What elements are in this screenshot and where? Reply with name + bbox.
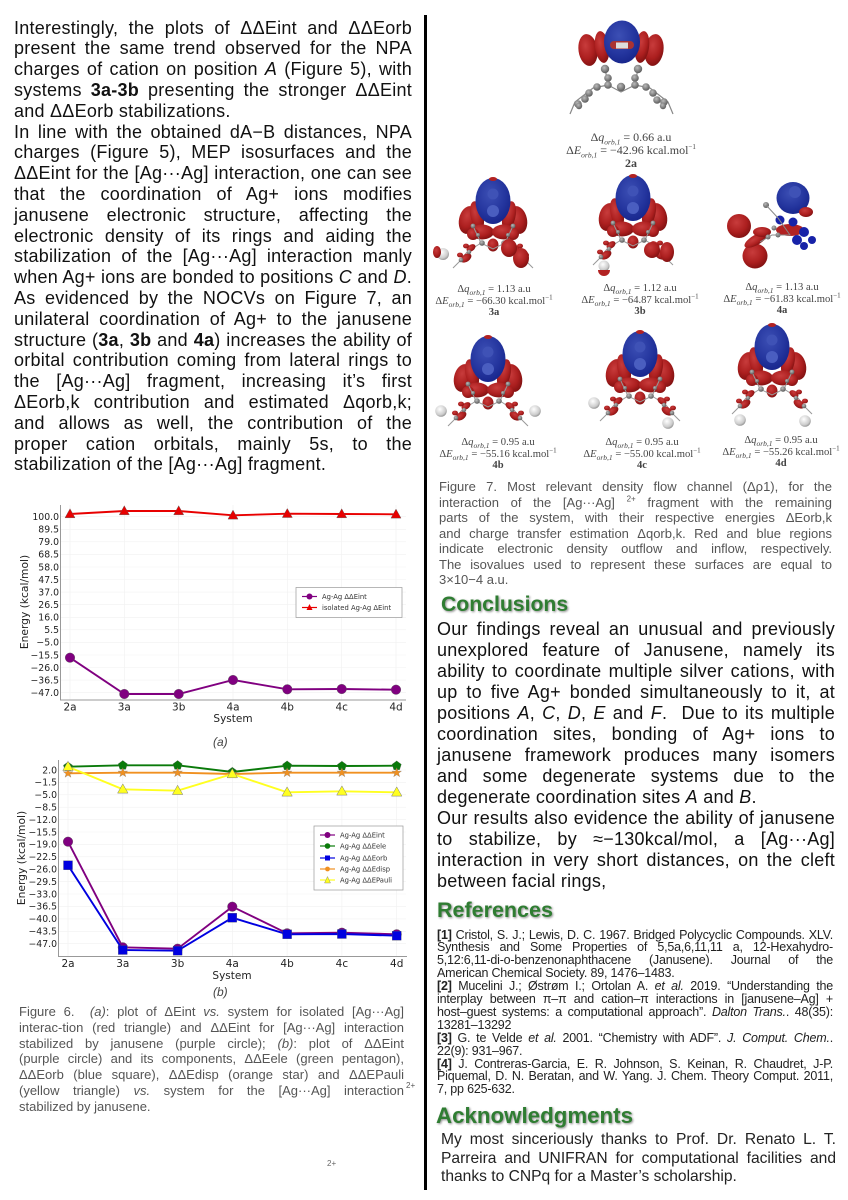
- text block: conclusions: ability to coordinate multiple silver cations, with: [437, 660, 835, 680]
- label: 3a values: 3a: [489, 307, 499, 318]
- text block: conclusions: and some degenerate systems due to the: [437, 766, 835, 786]
- label: 4c values: [583, 437, 701, 471]
- label: 2a values: Δqorb,1 = 0.66 a.u: [591, 130, 671, 146]
- legend (b): Ag-Ag ΔΔEele: [340, 842, 386, 850]
- caption: Figure 7: Figure 7. Most relevant density flow channel (Δρ1), for the: [439, 479, 832, 494]
- text block: acknowledgments: [441, 1131, 836, 1185]
- text block: interaction analysis: stabilization of the [Ag···Ag] interaction manly: [14, 246, 412, 266]
- label: (b): (b): [213, 985, 228, 999]
- text block: references: Synthesis and Some Properties of 5,5a,6,11,11 a, 12-Hexahydro-: [437, 940, 833, 954]
- y tick labels: −5.0: [36, 638, 59, 649]
- label: 4d values: ΔEorb,1 = −55.26 kcal.mol−1: [722, 444, 840, 460]
- text block: interaction analysis: ΔEorb,k contribution and estimated Δqorb,k;: [14, 392, 412, 412]
- label: 3a values: ΔEorb,1 = −66.30 kcal.mol−1: [435, 293, 553, 309]
- text block: interaction analysis: janusene electronic structure, affecting the: [14, 205, 412, 225]
- y tick labels: −36.5: [30, 675, 59, 686]
- x tick labels: 3b: [172, 702, 186, 714]
- chart (a): energy vs system: [18, 505, 406, 725]
- text block: interaction analysis: unilateral coordination of Ag+ to the janusene: [14, 309, 412, 329]
- x tick labels: 4a: [226, 702, 240, 714]
- caption: Figure 7: [439, 479, 832, 587]
- legend (b): Ag-Ag ΔΔEdisp: [340, 866, 390, 874]
- series: dispersion: [63, 768, 402, 778]
- label: 4b values: [439, 437, 557, 471]
- text block: interaction analysis: In line with the obtained dA−B distances, NPA: [14, 122, 412, 142]
- x tick labels: [61, 958, 403, 970]
- text block: conclusions: Our findings reveal an unusual and previously: [437, 618, 835, 638]
- text block: references: 13281–13292: [437, 1018, 511, 1032]
- molecule 4b: [435, 335, 541, 426]
- x tick labels: 3a: [118, 702, 131, 714]
- label: 4c values: 4c: [637, 460, 647, 471]
- heading: Acknowledgments: Acknowledgments: [436, 1103, 633, 1128]
- x tick labels: 4a: [226, 958, 239, 970]
- superscript fragment: 2+: [406, 1081, 415, 1090]
- text block: interaction analysis: Interestingly, the plots of ΔΔEint and ΔΔEorb: [14, 18, 412, 38]
- y tick labels: −22.5: [28, 852, 57, 863]
- label: 3a values: Δqorb,1 = 1.13 a.u: [457, 284, 531, 297]
- legend (a): [296, 588, 402, 618]
- text block: interaction analysis: present the same trend observed for the NPA: [14, 38, 412, 58]
- label: 4b values: ΔEorb,1 = −55.16 kcal.mol−1: [439, 446, 557, 462]
- chart (b): energy components vs system: [15, 760, 407, 982]
- text block: interaction analysis: the [Ag···Ag] fragment, increasing it’s first: [14, 371, 412, 391]
- y tick labels: 58.0: [38, 562, 59, 573]
- x tick labels: 4d: [389, 702, 403, 714]
- molecule 3b: [593, 174, 674, 276]
- x tick labels: 3b: [171, 958, 185, 970]
- text block: conclusions: degenerate coordination sites A and B.: [437, 786, 757, 806]
- text block: conclusions: positions A, C, D, E and F. Due to its multiple: [437, 702, 835, 722]
- y tick labels: 89.5: [38, 525, 59, 536]
- y axis title: Energy (kcal/mol): [18, 555, 31, 649]
- label: 2a values: [566, 130, 696, 170]
- caption: Figure 6: (purple circle) and its components, ΔΔEele (green pentagon),: [19, 1051, 404, 1066]
- caption: Figure 7: 3×10−4 a.u.: [439, 572, 508, 587]
- y tick labels: −47.0: [28, 939, 57, 950]
- y tick labels: −19.0: [28, 840, 57, 851]
- x tick labels: 2a: [61, 958, 75, 970]
- text block: conclusions: between facial rings,: [437, 870, 606, 890]
- x tick labels: 4b: [281, 702, 294, 714]
- x tick labels: 4b: [280, 958, 294, 970]
- y tick labels: 47.5: [38, 575, 59, 586]
- x tick labels: 4d: [390, 958, 403, 970]
- text block: references: Piquemal, D. N. Beratan, and W. Yang. J. Chem. Theory Comput. 2011,: [437, 1069, 833, 1083]
- series: Pauli: [63, 761, 402, 796]
- caption: Figure 7: The isovalues used to represent these surfaces are equal to: [439, 557, 832, 572]
- y tick labels: [28, 765, 57, 950]
- label: 4a values: Δqorb,1 = 1.13 a.u: [745, 282, 819, 295]
- caption: Figure 6: interac-tion (red triangle) and ΔΔEint for [Ag···Ag] interaction: [19, 1020, 404, 1035]
- text block: interaction analysis: orbital contribution coming from lateral rings to: [14, 350, 412, 370]
- text block: interaction analysis: systems 3a-3b presenting the stronger ΔΔEint: [14, 80, 412, 100]
- axes: [58, 760, 407, 956]
- figure 7: NOCV isosurfaces: [433, 20, 816, 429]
- text block: references: host–guest systems: a computational approach”. Dalton Trans.. 48(35):: [437, 1005, 833, 1019]
- text block: references: [3] G. te Velde et al. 2001. “Chemistry with ADF”. J. Comput. Chem..: [437, 1031, 833, 1045]
- caption: Figure 6: [19, 1004, 404, 1114]
- label: (a): (a): [213, 735, 228, 749]
- caption: Figure 6: ΔΔEorb (blue square), ΔΔEdisp (orange star) and ΔΔEPauli: [19, 1067, 404, 1082]
- text block: references: [2] Mucelini J.; Østrøm I.; Ortolan A. et al. 2019. “Understanding the: [437, 979, 833, 993]
- y tick labels: −15.5: [30, 650, 59, 661]
- heading: References: References: [437, 898, 553, 922]
- text block: conclusions: interaction in very short distances, on the cleft: [437, 850, 835, 870]
- label: 4c values: ΔEorb,1 = −55.00 kcal.mol−1: [583, 446, 701, 462]
- label: 4d values: 4d: [775, 458, 787, 469]
- series: interaction: [63, 837, 402, 954]
- x tick labels: 3a: [116, 958, 129, 970]
- caption: Figure 6: Figure 6. (a): plot of ΔEint vs. system for isolated [Ag···Ag]: [19, 1004, 404, 1019]
- x tick labels: 4c: [335, 702, 348, 714]
- text block: references: [1] Cristol, S. J.; Lewis, D. C. 1967. Bridged Polycyclic Compounds. XLV.: [437, 928, 833, 942]
- label: 4b values: Δqorb,1 = 0.95 a.u: [461, 437, 535, 450]
- y tick labels: −47.0: [30, 688, 59, 699]
- label: 2a values: ΔEorb,1 = −42.96 kcal.mol−1: [566, 143, 696, 159]
- label: 4a values: ΔEorb,1 = −61.83 kcal.mol−1: [723, 291, 841, 307]
- text block: conclusions: [436, 618, 835, 891]
- molecule 4d: [732, 323, 812, 427]
- y tick labels: 2.0: [42, 765, 57, 776]
- text block: interaction analysis: stabilization of the [Ag···Ag] fragment.: [14, 454, 326, 474]
- series: Ag-Ag interaction: [65, 653, 401, 699]
- y tick labels: −33.0: [28, 889, 57, 900]
- text block: references: 5,12:6,11-di-o-benzenonaphthacene (Janusene). Journal of the: [437, 953, 833, 967]
- caption: Figure 6: stabilized by janusene.: [19, 1098, 151, 1114]
- label: 4a values: 4a: [777, 305, 787, 316]
- central divider: [424, 15, 427, 1190]
- text block: interaction analysis: electronic density of its rings and aiding the: [14, 226, 412, 246]
- molecule 4c: [588, 330, 680, 429]
- molecule 4a: [727, 182, 816, 268]
- text block: conclusions: janusene framework produces many isomers: [437, 744, 835, 764]
- label: 3b values: Δqorb,1 = 1.12 a.u: [603, 283, 677, 296]
- label: 3b values: [581, 283, 699, 317]
- text block: interaction analysis: structure (3a, 3b and 4a) increases the ability of: [14, 330, 412, 350]
- y tick labels: 79.0: [38, 537, 59, 548]
- x axis title: System: [212, 970, 252, 982]
- text block: references: 7, pp 625-632.: [437, 1082, 515, 1096]
- y tick labels: −1.5: [34, 778, 57, 789]
- text block: interaction analysis: and allows as well, the contribution of the: [14, 413, 412, 433]
- y tick labels: 100.0: [32, 512, 59, 523]
- text block: interaction analysis: As evidenced by the NOCVs on Figure 7, an: [14, 288, 412, 308]
- y tick labels: 26.5: [38, 600, 59, 611]
- legend (a): isolated Ag-Ag ΔEint: [322, 604, 391, 612]
- text block: references: interplay between π–π and cation–π interactions in [janusene–Ag] +: [437, 992, 833, 1006]
- y tick labels: −36.5: [28, 902, 57, 913]
- axes: [60, 505, 406, 700]
- legend (b): Ag-Ag ΔΔEPauli: [340, 876, 392, 884]
- caption: Figure 7: indicate electronic density outflow and inflow, respectively.: [439, 541, 832, 556]
- y tick labels: [30, 512, 59, 699]
- x axis title: System: [213, 713, 253, 725]
- stray superscript: 2+: [327, 1159, 336, 1168]
- legend (a): Ag-Ag ΔΔEint: [322, 593, 367, 601]
- legend (b): [314, 826, 403, 890]
- x tick labels: 4c: [336, 958, 348, 970]
- y tick labels: −26.0: [30, 663, 59, 674]
- series: orbital: [64, 861, 401, 955]
- label: 3a values: [435, 284, 553, 318]
- y tick labels: −26.0: [28, 864, 57, 876]
- label: 4c values: Δqorb,1 = 0.95 a.u: [605, 437, 679, 450]
- caption: Figure 7: interaction of the [Ag···Ag] 2+ fragment with the remaining: [439, 494, 832, 510]
- text block: acknowledgments: Parreira and UNIFRAN for computational facilities and: [441, 1150, 836, 1166]
- text block: references: [4] J. Contreras-Garcia, E. R. Johnson, S. Keinan, R. Chaudret, J-P.: [437, 1057, 833, 1071]
- y tick labels: 5.5: [44, 625, 59, 636]
- label: 4d values: [722, 435, 840, 469]
- series: electrostatic: [63, 760, 401, 776]
- y tick labels: −8.5: [34, 802, 57, 814]
- caption: Figure 7: parts of the system, with their respective energies ΔEorb,k: [439, 510, 832, 525]
- caption: Figure 6: stabilized by janusene (purple circle); (b): plot of ΔΔEint: [19, 1036, 404, 1050]
- text block: conclusions: unexplored feature of Janusene, namely its: [437, 640, 835, 660]
- y tick labels: −15.5: [28, 827, 57, 838]
- text block: interaction analysis: and ΔΔEorb stabilizations.: [14, 101, 231, 121]
- text block: interaction analysis: [14, 18, 412, 474]
- text block: conclusions: coordination sites, bonding of Ag+ ions to: [437, 724, 835, 744]
- x tick labels: [63, 702, 403, 714]
- text block: references: [437, 928, 833, 1096]
- text block: interaction analysis: ΔΔEint for the [Ag···Ag] interaction, one can see: [14, 163, 412, 183]
- molecule 3a: [433, 177, 533, 268]
- text block: conclusions: to stabilize, by ≈−130kcal/mol, a [Ag···Ag]: [437, 828, 835, 848]
- legend (b): Ag-Ag ΔΔEorb: [340, 854, 387, 862]
- y tick labels: −5.0: [34, 790, 57, 801]
- y tick labels: −43.5: [28, 927, 57, 938]
- label: 4d values: Δqorb,1 = 0.95 a.u: [744, 435, 818, 448]
- label: 3b values: 3b: [634, 306, 646, 317]
- text block: acknowledgments: My most sinceriously thanks to Prof. Dr. Renato L. T.: [441, 1131, 836, 1148]
- y tick labels: −12.0: [28, 815, 57, 826]
- text block: interaction analysis: that the coordination of Ag+ ions modifies: [14, 184, 412, 204]
- series: isolated Ag-Ag: [65, 506, 401, 519]
- label: 3b values: ΔEorb,1 = −64.87 kcal.mol−1: [581, 292, 699, 308]
- text block: conclusions: Our results also evidence the ability of janusene: [437, 808, 835, 828]
- text block: interaction analysis: when Ag+ ions are bonded to positions C and D.: [14, 267, 412, 287]
- text block: references: 22(9): 931–967.: [437, 1044, 522, 1058]
- legend (b): Ag-Ag ΔΔEint: [340, 832, 385, 840]
- y tick labels: 68.5: [38, 550, 59, 561]
- y tick labels: −29.5: [28, 877, 57, 888]
- text block: interaction analysis: proper cation orbitals, mainly 5s, to the: [14, 434, 412, 454]
- y tick labels: 16.0: [38, 613, 59, 624]
- caption: Figure 6: (yellow triangle) vs. system for the [Ag···Ag] interaction: [19, 1083, 404, 1098]
- text block: conclusions: up to five Ag+ bonded simultaneously to it, at: [437, 682, 835, 702]
- text block: interaction analysis: charges of cation on position A (Figure 5), with: [14, 59, 412, 79]
- molecule 2a: [570, 20, 673, 114]
- x tick labels: 2a: [63, 702, 77, 714]
- label: 2a values: 2a: [625, 156, 637, 170]
- caption: Figure 7: and charge transfer estimation Δqorb,k. Red and blue regions: [439, 526, 832, 541]
- label: 4b values: 4b: [492, 460, 504, 471]
- text block: interaction analysis: charges (Figure 5), MEP isosurfaces and the: [14, 142, 412, 162]
- y tick labels: −40.0: [28, 914, 57, 925]
- y tick labels: 37.0: [38, 587, 59, 598]
- heading: Conclusions: Conclusions: [441, 593, 568, 616]
- text block: references: American Chemical Society. 89, 1476–1483.: [437, 966, 675, 980]
- text block: acknowledgments: thanks to CNPq for a Master’s scholarship.: [441, 1168, 737, 1185]
- y axis title: Energy (kcal/mol): [15, 811, 28, 905]
- label: 4a values: [723, 282, 841, 316]
